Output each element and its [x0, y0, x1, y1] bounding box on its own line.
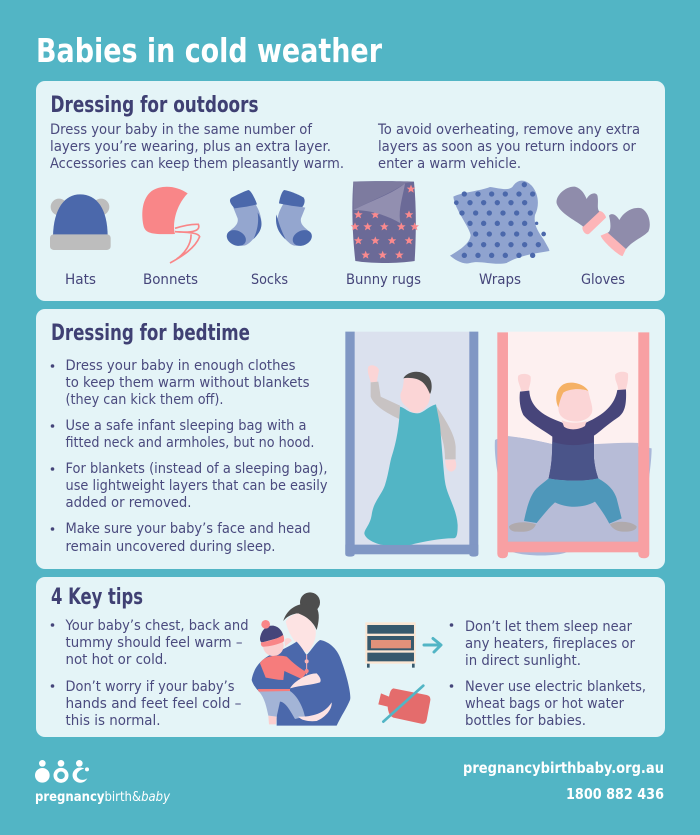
- heading: outdoors: Dressing for outdoors: [50, 93, 258, 118]
- bullet list: left tips: Your baby’s chest, back and: [65, 618, 249, 634]
- title: Babies in cold weather: [36, 31, 383, 70]
- labels: accessories: Hats: [65, 272, 96, 288]
- bullet list: right tips: wheat bags or hot water: [465, 696, 624, 712]
- bullet list: bedtime: For blankets (instead of a sleeping bag),: [66, 461, 328, 477]
- illustration: baby in sleeping bag in cot: [345, 332, 478, 557]
- icon: heater: [365, 622, 416, 668]
- icon: hat: [50, 194, 111, 250]
- bullet list: left tips: hands and feet feel cold –: [66, 696, 242, 712]
- bullet list: right tips: [450, 619, 646, 729]
- bullet list: bedtime: use lightweight layers that can be easily: [66, 478, 328, 494]
- bullet list: bedtime: to keep them warm without blankets: [66, 375, 310, 391]
- bullet list: left tips: [51, 618, 249, 729]
- text block: layers: [50, 122, 344, 172]
- text: logo wordmark: pregnancybirth&baby: [35, 789, 171, 805]
- bullet list: left tips: this is normal.: [66, 713, 160, 729]
- labels: accessories: Socks: [251, 272, 288, 288]
- illustration: mother holding baby: [252, 592, 350, 726]
- labels: accessories: Bonnets: [143, 272, 198, 288]
- icon: wrap: [450, 181, 549, 264]
- bullet list: bedtime: remain uncovered during sleep.: [66, 539, 276, 555]
- logo: pregnancy birth and baby: [35, 760, 171, 805]
- heading: bedtime: Dressing for bedtime: [51, 321, 250, 346]
- text block: layers: layers you’re wearing, plus an extra layer.: [50, 139, 331, 155]
- labels: accessories: [65, 272, 625, 288]
- icon: socks: [224, 190, 314, 249]
- panel: dressing for bedtime: [36, 309, 665, 569]
- text block: overheating: [377, 122, 640, 172]
- panel: dressing for outdoors: [36, 81, 665, 301]
- illustration: baby in clothes in cot with blanket: [495, 332, 652, 558]
- text: website: pregnancybirthbaby.org.au: [463, 759, 664, 777]
- bullet list: bedtime: fitted neck and armholes, but no hood.: [66, 435, 314, 451]
- heading: key tips: 4 Key tips: [51, 585, 143, 610]
- bullet list: right tips: in direct sunlight.: [465, 653, 581, 669]
- bullet list: right tips: any heaters, fireplaces or: [465, 636, 635, 652]
- labels: accessories: Gloves: [581, 272, 625, 288]
- icon: gloves: [557, 187, 650, 256]
- bullet list: bedtime: (they can kick them off).: [66, 392, 224, 408]
- icon: bunny rug: [351, 181, 419, 263]
- labels: accessories: Bunny rugs: [346, 272, 421, 288]
- bullet list: left tips: Don’t worry if your baby’s: [66, 679, 234, 695]
- bullet list: bedtime: [51, 358, 328, 555]
- bullet list: bedtime: Make sure your baby’s face and head: [66, 521, 310, 537]
- text block: overheating: layers as soon as you return indoors or: [378, 139, 636, 155]
- bullet list: right tips: bottles for babies.: [465, 713, 586, 729]
- bullet list: bedtime: added or removed.: [66, 495, 192, 511]
- bullet list: right tips: Don’t let them sleep near: [465, 619, 632, 635]
- icon: logo figures: [35, 760, 89, 783]
- panel: 4 key tips: [36, 577, 665, 737]
- bullet list: bedtime: Use a safe infant sleeping bag with a: [66, 418, 306, 434]
- bullet list: right tips: Never use electric blankets,: [465, 679, 646, 695]
- text: phone number: 1800 882 436: [566, 785, 664, 803]
- icon: bonnet: [142, 187, 200, 263]
- bullet list: left tips: tummy should feel warm –: [66, 635, 242, 651]
- text block: layers: Dress your baby in the same number of: [50, 122, 313, 138]
- text block: layers: Accessories can keep them pleasantly warm.: [50, 156, 344, 172]
- text block: overheating: To avoid overheating, remove any extra: [377, 122, 640, 138]
- icon: crossed-out hot water bottle: [378, 686, 430, 724]
- arrow: heater warning: [424, 638, 441, 652]
- text block: overheating: enter a warm vehicle.: [378, 156, 521, 172]
- labels: accessories: Wraps: [479, 272, 521, 288]
- bullet list: left tips: not hot or cold.: [66, 652, 168, 668]
- bullet list: bedtime: Dress your baby in enough clothes: [66, 358, 296, 374]
